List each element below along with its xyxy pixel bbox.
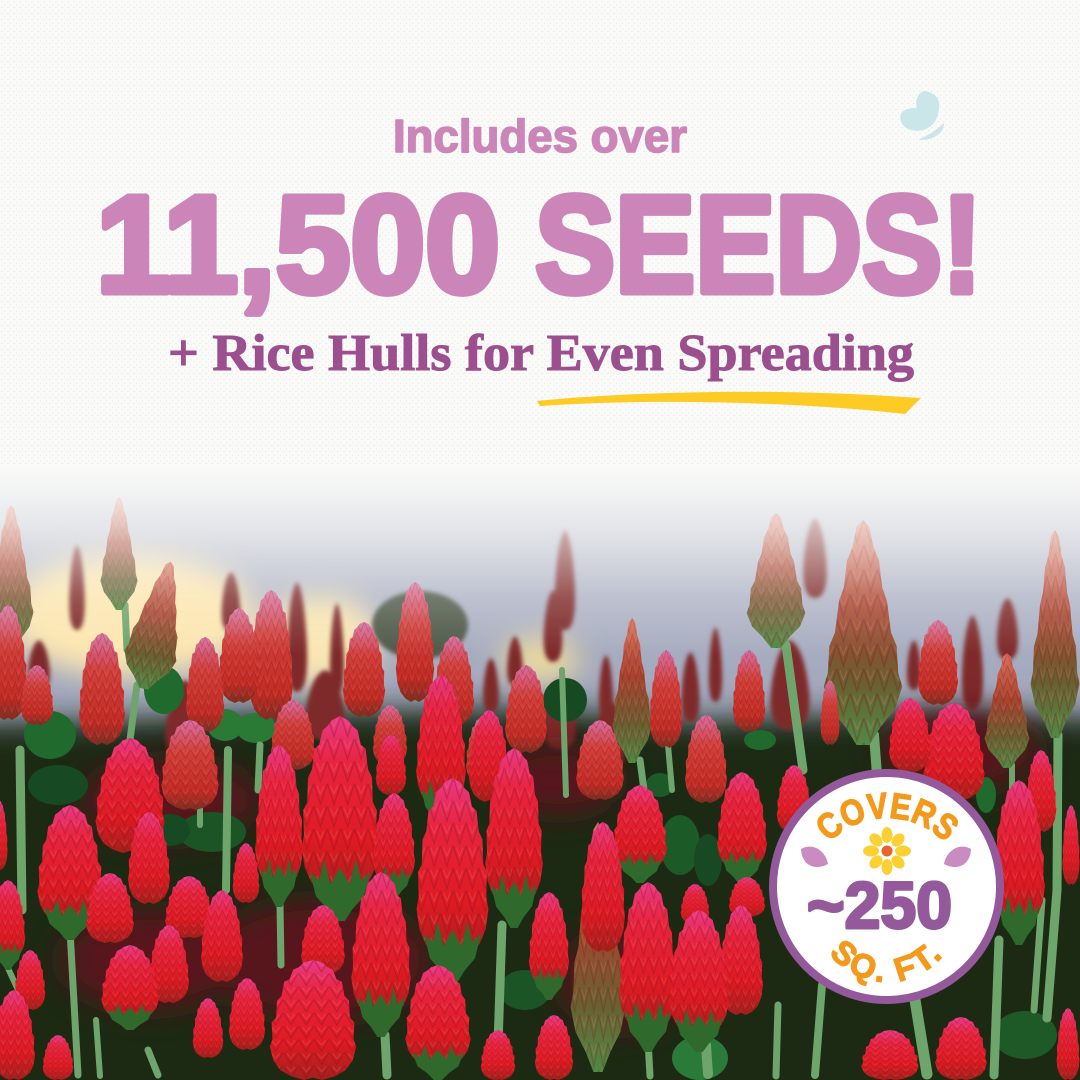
heading: 11,500 seeds (96, 168, 982, 322)
middle row of clover (0, 497, 1080, 810)
badge text: covers: COVERS (817, 792, 958, 840)
back row of blurred clover (28, 518, 1018, 770)
sunset glow (5, 553, 580, 686)
icon: left petal (801, 847, 828, 867)
yellow underline swoosh (537, 392, 921, 414)
front row of clover (0, 675, 1080, 1080)
stems (2, 605, 1058, 1076)
badge: covers 250 sq ft (769, 769, 1024, 1004)
heading: 11,500 seeds: SEEDS! (535, 168, 982, 322)
icon: right petal (944, 847, 971, 867)
badge circle (773, 773, 1000, 1000)
foliage leaves (24, 666, 1057, 1080)
dark foliage ground (0, 760, 1080, 1080)
white fade over photo top (0, 465, 1080, 655)
title: includes over: Includes over (393, 110, 687, 162)
dark foliage horizon (0, 708, 1080, 800)
subheading: rice hulls: + Rice Hulls for Even Spreading (168, 325, 914, 382)
heading: 11,500 seeds: 11,500 (96, 168, 500, 322)
sky (0, 465, 1080, 765)
icon: yellow daisy (863, 827, 911, 875)
badge number: 250: ~250 (807, 868, 952, 942)
icon: butterfly (900, 91, 944, 140)
blurred dark red depth behind the field (60, 710, 1040, 1030)
distant tree (372, 591, 468, 659)
photo: crimson clover field (0, 465, 1080, 1080)
badge text: sq ft: SQ. FT. (831, 940, 942, 986)
